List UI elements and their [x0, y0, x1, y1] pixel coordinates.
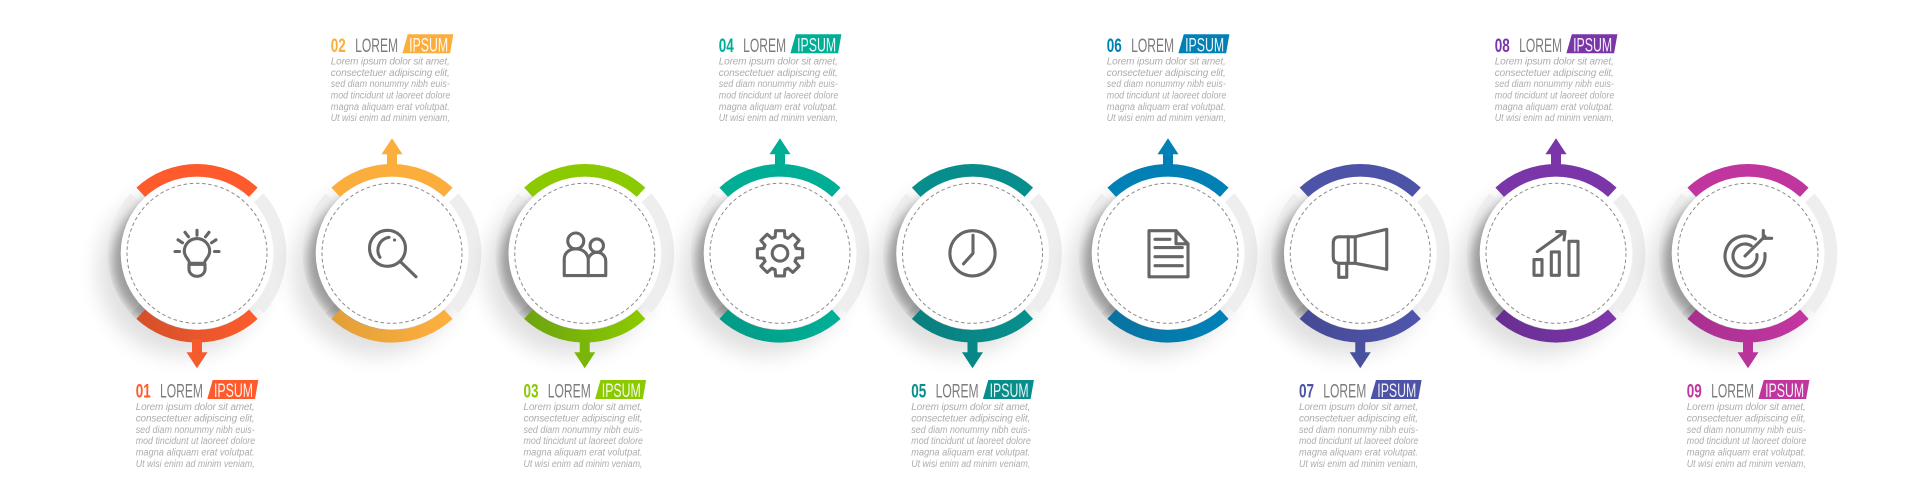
text block 02: Ut wisi enim ad minim veniam,	[331, 113, 450, 124]
text block 01	[136, 380, 258, 470]
text block 08: Lorem ipsum dolor sit amet,	[1495, 56, 1614, 68]
text block 04: Lorem ipsum dolor sit amet,	[719, 56, 838, 68]
text block 07: mod tincidunt ut laoreet dolore	[1299, 436, 1419, 447]
text block 01: Ut wisi enim ad minim veniam,	[136, 459, 255, 470]
icon: clock	[950, 231, 995, 276]
text block 08: mod tincidunt ut laoreet dolore	[1495, 90, 1615, 102]
text block 06: Lorem ipsum dolor sit amet,	[1107, 56, 1226, 68]
text block 09: LOREM	[1711, 382, 1754, 403]
text block 05: consectetuer adipiscing elit,	[911, 414, 1030, 425]
text block 09: magna aliquam erat volutpat.	[1687, 448, 1806, 459]
step 5: time	[874, 170, 1055, 368]
text block 08: magna aliquam erat volutpat.	[1495, 102, 1614, 113]
step 9: target	[1649, 170, 1831, 368]
text block 09: sed diam nonummy nibh euis-	[1687, 425, 1806, 436]
text block 06: consectetuer adipiscing elit,	[1107, 68, 1226, 79]
text block 03: consectetuer adipiscing elit,	[524, 414, 642, 425]
text block 03: sed diam nonummy nibh euis-	[524, 425, 643, 436]
text block 04: 04	[719, 36, 734, 57]
text block 02: sed diam nonummy nibh euis-	[331, 79, 450, 90]
text block 09: Ut wisi enim ad minim veniam,	[1687, 459, 1806, 470]
text block 01: sed diam nonummy nibh euis-	[136, 425, 255, 436]
text block 05: IPSUM	[990, 381, 1029, 402]
text block 08: 08	[1495, 36, 1510, 57]
text block 02: Lorem ipsum dolor sit amet,	[331, 56, 450, 68]
text block 09: consectetuer adipiscing elit,	[1687, 414, 1806, 425]
text block 06: mod tincidunt ut laoreet dolore	[1107, 90, 1227, 102]
text block 09: Lorem ipsum dolor sit amet,	[1687, 402, 1806, 413]
step 1: idea	[98, 170, 280, 368]
text block 08: sed diam nonummy nibh euis-	[1495, 79, 1614, 90]
arrow: down	[962, 339, 983, 368]
icon: target	[1725, 231, 1772, 276]
text block 05: Ut wisi enim ad minim veniam,	[911, 459, 1030, 470]
text block 06: IPSUM	[1185, 36, 1224, 56]
arrow: down	[1738, 339, 1758, 368]
text block 05	[911, 380, 1034, 470]
text block 05: magna aliquam erat volutpat.	[911, 448, 1030, 459]
text block 02: IPSUM	[409, 36, 448, 56]
text block 06	[1107, 34, 1229, 124]
text block 01: LOREM	[160, 382, 203, 403]
text block 02	[331, 34, 453, 124]
text block 01: consectetuer adipiscing elit,	[136, 414, 255, 425]
text block 05: Lorem ipsum dolor sit amet,	[911, 402, 1030, 413]
text block 06: 06	[1107, 36, 1122, 57]
arrow: up	[1546, 138, 1566, 167]
text block 02: consectetuer adipiscing elit,	[331, 68, 450, 79]
icon: people	[564, 233, 606, 276]
arrow: up	[382, 138, 402, 167]
step 6: document	[1069, 138, 1251, 355]
text block 08: Ut wisi enim ad minim veniam,	[1495, 113, 1614, 124]
text block 01: IPSUM	[214, 381, 253, 402]
text block 02: LOREM	[355, 36, 398, 57]
icon: light bulb	[175, 230, 219, 276]
text block 04: consectetuer adipiscing elit,	[719, 68, 838, 79]
text block 03: IPSUM	[602, 381, 641, 402]
text block 06: magna aliquam erat volutpat.	[1107, 102, 1226, 113]
text block 09: mod tincidunt ut laoreet dolore	[1687, 436, 1807, 447]
text block 07: LOREM	[1323, 382, 1366, 403]
text block 01: magna aliquam erat volutpat.	[136, 448, 255, 459]
text block 03: Lorem ipsum dolor sit amet,	[524, 402, 642, 413]
arrow: up	[1158, 138, 1178, 167]
text block 07: IPSUM	[1377, 381, 1416, 402]
text block 07: sed diam nonummy nibh euis-	[1299, 425, 1419, 436]
text block 09: IPSUM	[1765, 381, 1804, 402]
text block 04: sed diam nonummy nibh euis-	[719, 79, 838, 90]
text block 06: Ut wisi enim ad minim veniam,	[1107, 113, 1226, 124]
text block 08	[1495, 34, 1617, 124]
text block 09: 09	[1687, 382, 1702, 403]
text block 07: Lorem ipsum dolor sit amet,	[1299, 402, 1418, 413]
icon: gear	[757, 231, 803, 276]
text block 04	[719, 34, 841, 124]
step 8: growth chart	[1457, 138, 1639, 355]
step 7: megaphone	[1261, 170, 1443, 368]
text block 02: mod tincidunt ut laoreet dolore	[331, 90, 451, 102]
text block 08: IPSUM	[1573, 36, 1612, 56]
text block 04: Ut wisi enim ad minim veniam,	[719, 113, 838, 124]
arrow: down	[186, 339, 208, 368]
step 3: people	[486, 170, 668, 368]
text block 07	[1299, 380, 1422, 470]
text block 01: Lorem ipsum dolor sit amet,	[136, 402, 255, 413]
step 2: search	[293, 138, 475, 355]
text block 08: consectetuer adipiscing elit,	[1495, 68, 1614, 79]
text block 03: mod tincidunt ut laoreet dolore	[524, 436, 643, 447]
text block 04: mod tincidunt ut laoreet dolore	[719, 90, 839, 102]
icon: magnifier	[370, 230, 416, 277]
text block 05: sed diam nonummy nibh euis-	[911, 425, 1031, 436]
text block 03: LOREM	[548, 382, 591, 403]
arrow: down	[1350, 339, 1371, 368]
text block 06: sed diam nonummy nibh euis-	[1107, 79, 1226, 90]
text block 09	[1687, 380, 1809, 470]
text block 01: 01	[136, 382, 151, 403]
text block 02: magna aliquam erat volutpat.	[331, 102, 450, 113]
text block 05: 05	[911, 382, 927, 403]
text block 08: LOREM	[1519, 36, 1562, 57]
text block 04: magna aliquam erat volutpat.	[719, 102, 838, 113]
text block 02: 02	[331, 36, 346, 57]
step 4: settings	[681, 138, 863, 355]
text block 04: IPSUM	[797, 36, 836, 56]
text block 07: 07	[1299, 382, 1314, 403]
text block 03	[524, 380, 646, 470]
text block 03: Ut wisi enim ad minim veniam,	[524, 459, 642, 470]
text block 07: consectetuer adipiscing elit,	[1299, 414, 1418, 425]
text block 05: LOREM	[936, 382, 979, 403]
text block 07: Ut wisi enim ad minim veniam,	[1299, 459, 1418, 470]
icon: bar chart	[1534, 232, 1578, 275]
text block 05: mod tincidunt ut laoreet dolore	[911, 436, 1031, 447]
text block 06: LOREM	[1131, 36, 1174, 57]
text block 07: magna aliquam erat volutpat.	[1299, 448, 1418, 459]
text block 03: magna aliquam erat volutpat.	[524, 448, 642, 459]
text block 04: LOREM	[743, 36, 786, 57]
icon: document	[1149, 231, 1188, 277]
arrow: up	[770, 138, 790, 167]
text block 03: 03	[524, 382, 538, 403]
icon: megaphone	[1333, 229, 1387, 277]
arrow: down	[574, 339, 595, 368]
text block 01: mod tincidunt ut laoreet dolore	[136, 436, 256, 447]
